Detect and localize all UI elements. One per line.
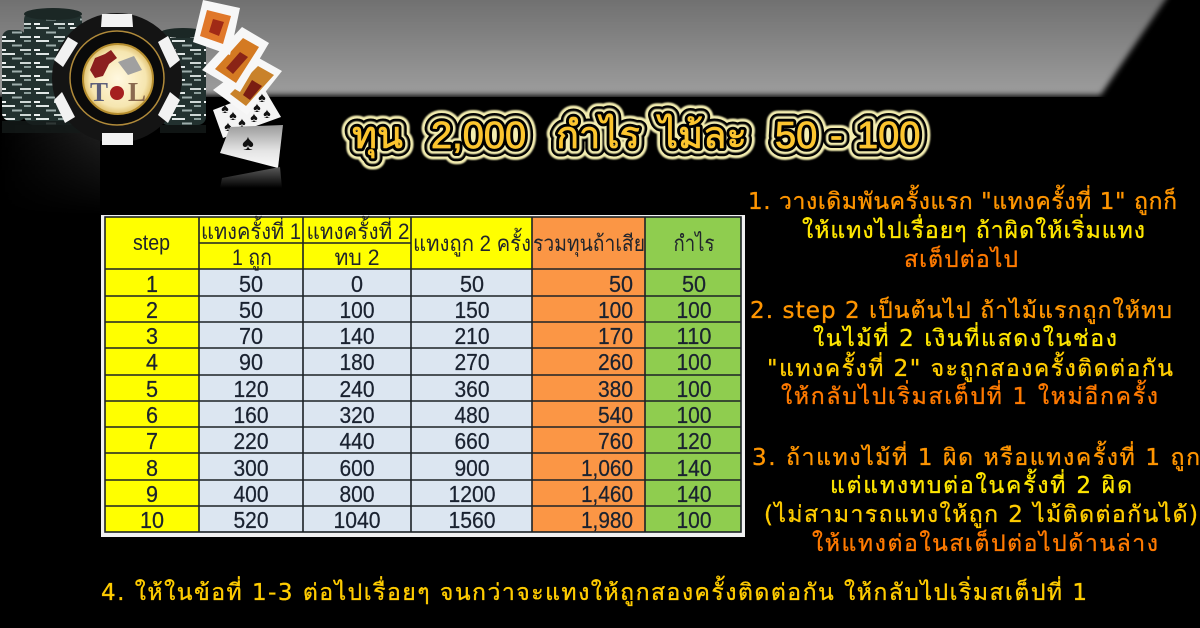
table: win twice values: 900 (454, 455, 490, 481)
icon: playing cards fan: ♠ (224, 118, 232, 134)
table: second bet values: 1040 (334, 507, 380, 533)
title: 50 (775, 115, 828, 157)
table: win twice values: 1200 (448, 481, 496, 507)
table: profit column (645, 217, 741, 532)
table: profit values (676, 271, 712, 533)
table: header labels (133, 216, 715, 271)
table: header and step column (105, 217, 532, 532)
icon: playing cards fan: ♠ (242, 130, 254, 155)
table: first bet values: 520 (234, 507, 268, 533)
table (101, 215, 745, 537)
title: ทุน (352, 115, 414, 158)
title: ไม้ละ (656, 114, 757, 157)
title: ทุน (352, 115, 414, 158)
table: cumulative loss values: 380 (598, 376, 633, 402)
icon: playing cards fan: ♠ (238, 114, 246, 130)
title: 2,000 (431, 115, 537, 157)
table: win twice values: 660 (454, 428, 490, 454)
instruction 1: ให้แทงไปเรื่อยๆ ถ้าผิดให้เริ่มแทง (802, 214, 1145, 244)
table: cumulative loss values: 260 (598, 349, 633, 375)
table: step numbers: 5 (146, 376, 158, 402)
table: win twice values: 360 (454, 376, 490, 402)
title: 100 (857, 115, 920, 157)
table: first bet values: 220 (234, 428, 268, 454)
title: กำไร (556, 114, 650, 157)
table: step numbers: 1 (146, 271, 158, 297)
table: first bet values: 400 (234, 481, 268, 507)
table: header labels: 1 ถูก (232, 245, 272, 271)
table: second bet values: 0 (351, 271, 363, 297)
instruction 3 (752, 441, 1200, 557)
table: second bet values: 180 (340, 349, 374, 375)
title: 100 (857, 115, 920, 157)
icon: chip logo TL: T (90, 77, 108, 107)
icon: playing cards fan: ♠ (229, 107, 237, 123)
title: กำไร (556, 114, 650, 157)
table: profit values: 100 (676, 297, 712, 323)
table: win twice values: 210 (454, 323, 490, 349)
title: 100 (857, 115, 920, 157)
table: profit values: 100 (676, 402, 712, 428)
table: second bet values: 140 (340, 323, 374, 349)
table: cumulative loss values: 170 (598, 323, 633, 349)
table: second bet values: 440 (340, 428, 374, 454)
table: profit values: 100 (676, 507, 712, 533)
table: profit values: 50 (682, 271, 706, 297)
title: - (830, 115, 853, 157)
icon: playing cards fan: ♠ (253, 99, 261, 115)
title: กำไร (556, 114, 650, 157)
title: - (830, 115, 853, 157)
instruction 3: ให้แทงต่อในสเต็ปต่อไปด้านล่าง (812, 528, 1158, 557)
table: first bet values: 300 (234, 455, 268, 481)
icon: playing cards fan: ♠ (250, 109, 258, 125)
title: ทุน (352, 115, 414, 158)
instruction 1: 1. วางเดิมพันครั้งแรก "แทงครั้งที่ 1" ถูกก็ (748, 185, 1177, 215)
table: first bet values: 50 (239, 297, 263, 323)
table: win twice values: 50 (460, 271, 484, 297)
table: header labels: รวมทุนถ้าเสีย (533, 231, 645, 257)
instruction 1: สเต็ปต่อไป (904, 244, 1018, 273)
title: 50 (775, 115, 828, 157)
table: first bet values: 90 (239, 349, 263, 375)
icon: playing cards fan: ♠ (258, 89, 266, 105)
title: 2,000 (431, 115, 537, 157)
table: second bet values: 320 (340, 402, 374, 428)
table: cumulative loss values: 50 (609, 271, 633, 297)
instruction 2: ในไม้ที่ 2 เงินที่แสดงในช่อง (813, 322, 1117, 352)
title: ทุน (352, 115, 414, 158)
icon: playing cards fan (193, 0, 283, 188)
title: 100 (857, 115, 920, 157)
instruction 3: (ไม่สามารถแทงให้ถูก 2 ไม้ติดต่อกันได้) (764, 501, 1198, 528)
table: win twice values: 270 (454, 349, 490, 375)
table: header labels: ทบ 2 (334, 245, 380, 270)
table: step numbers: 2 (146, 297, 158, 323)
table: first bet values: 160 (234, 402, 268, 428)
table: header labels: แทงครั้งที่ 2 (306, 216, 410, 244)
title: 50 (775, 115, 828, 157)
table: cumulative loss values: 1,460 (581, 481, 633, 507)
table: step numbers: 4 (146, 349, 158, 375)
table: step numbers: 6 (146, 402, 158, 428)
title: - (830, 115, 853, 157)
table: first bet values: 50 (239, 271, 263, 297)
instruction 1 (748, 185, 1177, 273)
title: ไม้ละ (656, 114, 757, 157)
title: 50 (775, 115, 828, 157)
instruction 2: ให้กลับไปเริ่มสเต็ปที่ 1 ใหม่อีกครั้ง (781, 380, 1158, 410)
table: win twice values: 1560 (448, 507, 496, 533)
title: ไม้ละ (656, 114, 757, 157)
table: second bet values: 100 (340, 297, 374, 323)
icon: chip logo TL: L (128, 77, 146, 107)
title: ทุน (352, 115, 414, 158)
table: step numbers: 9 (146, 481, 158, 507)
icon: playing cards fan: ♠ (221, 100, 229, 116)
title: กำไร (556, 114, 650, 157)
title: ไม้ละ (656, 114, 757, 157)
icon: poker chip stacks (2, 8, 206, 133)
title (352, 114, 920, 158)
title: ไม้ละ (656, 114, 757, 157)
table: profit values: 140 (676, 481, 712, 507)
table: stake columns (199, 269, 532, 532)
table: step numbers (140, 271, 164, 533)
title: - (830, 115, 853, 157)
title: กำไร (556, 114, 650, 157)
table: profit values: 100 (676, 349, 712, 375)
instruction 4: 4. ให้ในข้อที่ 1-3 ต่อไปเรื่อยๆ จนกว่าจะแทงให้ถูกสองครั้งติดต่อกัน ให้กลับไปเริ่มสเต็ปที่ 1 (101, 576, 1087, 606)
table: cumulative loss values: 1,060 (581, 455, 633, 481)
table: cumulative loss values: 760 (598, 428, 633, 454)
table: profit values: 110 (676, 323, 712, 349)
table: profit values: 140 (676, 455, 712, 481)
title: 2,000 (431, 115, 537, 157)
table: win twice values: 480 (454, 402, 490, 428)
table: cumulative loss values: 1,980 (581, 507, 633, 533)
table: profit values: 100 (676, 376, 712, 402)
table: header labels: แทงถูก 2 ครั้ง (413, 228, 531, 257)
icon: chip logo TL (52, 13, 182, 145)
table: first bet values (234, 271, 268, 533)
table: second bet values: 600 (340, 455, 374, 481)
table: header labels: แทงครั้งที่ 1 (201, 216, 301, 244)
table: header labels: step (133, 230, 170, 255)
instruction 3: 3. ถ้าแทงไม้ที่ 1 ผิด หรือแทงครั้งที่ 1 ถูก (752, 441, 1200, 471)
table: cumulative loss values (581, 271, 633, 533)
title: - (830, 115, 853, 157)
table: cumulative loss values: 540 (598, 402, 633, 428)
table: cumulative loss column (532, 217, 645, 532)
instruction 2 (750, 295, 1173, 410)
instruction 3: แต่แทงทบต่อในครั้งที่ 2 ผิด (830, 469, 1132, 499)
table: profit values: 120 (676, 428, 712, 454)
table: header labels: กำไร (674, 231, 715, 256)
table: step numbers: 8 (146, 455, 158, 481)
icon: playing cards fan: ♠ (263, 105, 271, 121)
table: second bet values (334, 271, 380, 533)
title: 100 (857, 115, 920, 157)
table: second bet values: 240 (340, 376, 374, 402)
instruction 2: "แทงครั้งที่ 2" จะถูกสองครั้งติดต่อกัน (767, 352, 1173, 382)
table: first bet values: 120 (234, 376, 268, 402)
table: step numbers: 10 (140, 507, 164, 533)
table: win twice values (448, 271, 496, 533)
table: step numbers: 7 (146, 428, 158, 454)
title: 2,000 (431, 115, 537, 157)
table: cumulative loss values: 100 (598, 297, 633, 323)
table: first bet values: 70 (239, 323, 263, 349)
table: second bet values: 800 (340, 481, 374, 507)
table: step numbers: 3 (146, 323, 158, 349)
instruction 2: 2. step 2 เป็นต้นไป ถ้าไม้แรกถูกให้ทบ (750, 295, 1172, 324)
title: 2,000 (431, 115, 537, 157)
background: grey wall (0, 0, 1170, 192)
title: 50 (775, 115, 828, 157)
table: win twice values: 150 (454, 297, 490, 323)
